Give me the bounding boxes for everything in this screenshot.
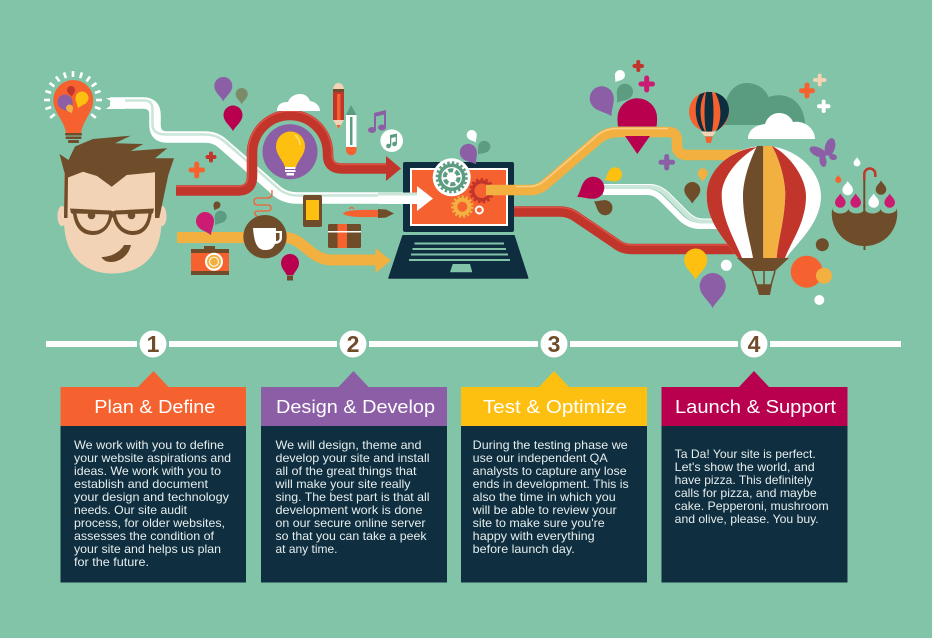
ribbon: white path from idea to laptop: [106, 98, 433, 210]
ribbon: red path with arrow: [176, 111, 401, 190]
panel: Launch and Support: calls for pizza, and maybe: [675, 486, 817, 500]
icon: pink bulb: [281, 254, 299, 280]
panel: Test and Optimize: will be able to review your: [472, 503, 617, 517]
icon: idea lightbulb with rays: [44, 71, 102, 143]
icon: white pencil: [346, 105, 356, 155]
icon: white cloud: [748, 113, 815, 139]
icon: dark green cloud: [723, 83, 805, 125]
panel: Test and Optimize: ends in development. This is: [473, 477, 629, 491]
ribbon: yellow path to balloon: [486, 128, 745, 190]
icon: smartphone: [303, 195, 322, 227]
ribbon: red path to balloon: [513, 208, 745, 249]
icon: camera: [191, 246, 229, 275]
icon: upside-down umbrella with drops: [832, 157, 897, 250]
icons: circles right of balloon: [791, 238, 832, 305]
panel: Test and Optimize: use our independent QA: [473, 451, 608, 465]
panel: Test and Optimize: [461, 371, 647, 582]
icon: small striped balloon: [689, 92, 729, 143]
panel: Design and Develop: all of the great things that: [276, 464, 417, 478]
panel: Plan and Define: your design and technology: [74, 490, 229, 504]
panel: Launch and Support: Launch & Support: [675, 396, 836, 417]
panel: Design and Develop: development work is done: [276, 503, 423, 517]
icon: yellow lightbulb in purple circle: [262, 124, 318, 179]
panel: Design and Develop: at any time.: [276, 542, 338, 556]
icon: laptop: [389, 162, 528, 278]
icon: butterfly: [808, 137, 838, 168]
icons: floating drops upper left: [214, 77, 248, 131]
panel: Design and Develop: will make your site really: [274, 477, 410, 491]
ribbon: white path to balloon: [603, 184, 730, 226]
icon: purple music note: [368, 110, 386, 133]
panel: Plan and Define: We work with you to define: [74, 438, 224, 452]
icons: drops by white ribbon: [572, 165, 625, 218]
timeline with numbered steps: [46, 330, 901, 358]
panel: Test and Optimize: site to make sure you're: [473, 516, 605, 530]
panel: Plan and Define: assesses the condition of: [74, 529, 215, 543]
panel: Launch and Support: have pizza. This definitely: [675, 473, 813, 487]
panel: Test and Optimize: Test & Optimize: [483, 396, 627, 417]
icon: gears on screen: [433, 158, 493, 217]
panel: Plan and Define: needs. Our site audit: [74, 503, 188, 517]
ribbon segment: yellow start over gear: [486, 185, 516, 195]
panel: Launch and Support: Let's show the world, and: [675, 460, 815, 474]
timeline with numbered steps: 2: [347, 331, 359, 357]
timeline with numbered steps: 4: [748, 331, 761, 357]
panel: Design and Develop: on our secure online server: [276, 516, 426, 530]
panel: Plan and Define: [60, 371, 246, 582]
timeline with numbered steps: 3: [548, 331, 560, 357]
panel: Launch and Support: and olive, please. You buy.: [675, 512, 819, 526]
panel: Launch and Support: Ta Da! Your site is perfect.: [675, 447, 816, 461]
panel: Test and Optimize: also the time in which you: [473, 490, 616, 504]
icon: small white cloud: [277, 94, 320, 111]
icon: small drops left of balloon: [684, 168, 732, 308]
panel: Launch and Support: [662, 371, 848, 582]
panel: Plan and Define: for the future.: [74, 555, 149, 569]
panel: Design and Develop: so that you can take a peek: [276, 529, 428, 543]
panel: Plan and Define: ideas. We work with you to: [74, 464, 221, 478]
panel: Launch and Support: cake. Pepperoni, mushroom: [675, 499, 829, 513]
icons: plus signs upper right: [802, 76, 828, 111]
panel: Test and Optimize: analysts to capture any lose: [473, 464, 627, 478]
ribbon: yellow path with arrow: [177, 238, 391, 273]
panel: Design and Develop: develop your site and install: [276, 451, 430, 465]
timeline with numbered steps: 1: [147, 331, 160, 357]
ribbon segment: white arrow over screen: [378, 186, 433, 211]
panel: Design and Develop: We will design, theme and: [276, 438, 422, 452]
icon: face with hair and glasses: [58, 136, 174, 274]
panel: Test and Optimize: happy with everything: [473, 529, 595, 543]
panel: Test and Optimize: before launch day.: [473, 542, 575, 556]
icon: red pencil: [333, 83, 344, 129]
icon: large pink drop split by ribbon: [618, 98, 657, 154]
icon: fountain pen: [343, 208, 394, 218]
icons: drops and pluses upper right: [585, 62, 672, 168]
icon: large hot air balloon: [707, 146, 821, 295]
panel: Design and Develop: [261, 371, 447, 582]
panel: Design and Develop: sing. The best part is that all: [276, 490, 430, 504]
icons: plus signs left: [191, 154, 214, 176]
icons: splash drops over yellow ribbon: [193, 200, 229, 239]
icon: coffee cup: [243, 190, 287, 258]
panel: Design and Develop: Design & Develop: [276, 396, 435, 417]
panel: Plan and Define: your site and helps us plan: [74, 542, 221, 556]
panel: Test and Optimize: During the testing phase we: [473, 438, 628, 452]
icon: gift box: [328, 224, 361, 248]
panel: Plan and Define: process, for older websites,: [74, 516, 225, 530]
panel: Plan and Define: Plan & Define: [94, 396, 215, 417]
panel: Plan and Define: your website aspirations and: [74, 451, 231, 465]
panel: Plan and Define: establish and document: [74, 477, 209, 491]
icons: drops above laptop: [457, 128, 493, 169]
icon: music note badge: [380, 129, 403, 152]
